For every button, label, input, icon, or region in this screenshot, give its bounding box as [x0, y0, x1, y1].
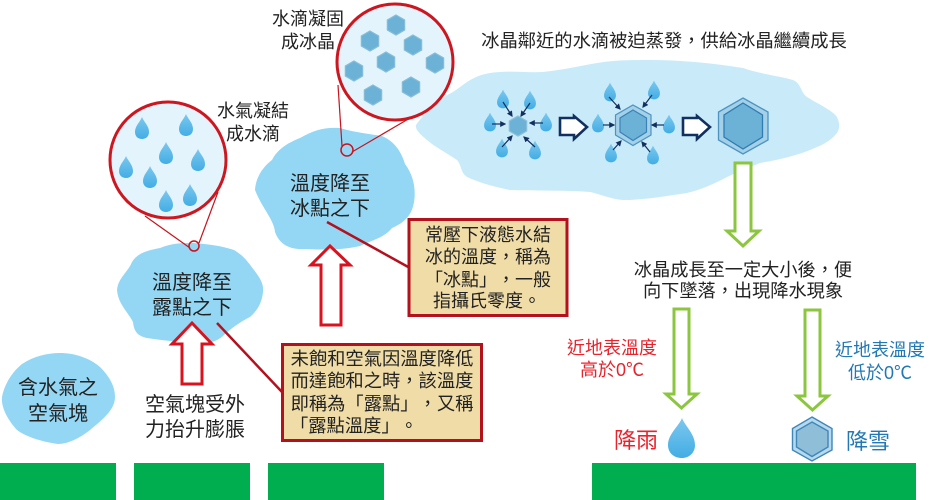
icon: snow crystal	[792, 417, 832, 461]
callout: dew point definition: 而達飽和之時，該溫度	[291, 370, 473, 391]
label: air mass lifted: 力抬升膨脹	[145, 418, 245, 441]
label: crystal growth heading: 冰晶鄰近的水滴被迫蒸發，供給冰晶繼續成長	[481, 30, 847, 51]
label: surface below freezing: 近地表溫度	[835, 340, 925, 360]
label: vapor condenses into droplets: 水氣凝結	[217, 101, 289, 121]
label: air mass: 空氣塊	[28, 402, 88, 425]
label: droplets freeze into crystals: 成冰晶	[281, 32, 335, 52]
label: droplets freeze into crystals: 水滴凝固	[272, 9, 344, 29]
label: surface below freezing: 低於0℃	[848, 363, 912, 383]
red arrow: air mass rises	[172, 323, 212, 384]
ground: left segment 2	[134, 463, 250, 500]
callout leader: freezing point	[327, 222, 410, 268]
callout: dew point definition: 「露點溫度」。	[290, 415, 418, 436]
label: crystal falls as precipitation: 冰晶成長至一定大小後，便	[634, 260, 852, 280]
arrow: growth step 1	[560, 116, 587, 139]
callout: dew point definition: 即稱為「露點」，又稱	[291, 393, 473, 414]
callout leader: dew point	[217, 323, 282, 392]
label: snow: 降雪	[846, 429, 890, 454]
icon: rain drop	[668, 418, 695, 458]
icon: large crystal	[718, 98, 768, 154]
cloud: air mass with moisture	[2, 353, 115, 444]
ground: left segment 1	[0, 463, 116, 500]
callout: freezing point definition: 指攝氏零度。	[433, 291, 541, 311]
label: air mass lifted: 空氣塊受外	[145, 393, 245, 416]
label: air mass: 含水氣之	[18, 376, 98, 399]
callout: dew point definition	[282, 344, 482, 440]
green arrow: toward snow	[797, 310, 828, 410]
label: below dew point: 露點之下	[152, 296, 232, 319]
label: below dew point: 溫度降至	[152, 271, 232, 294]
label: vapor condenses into droplets: 成水滴	[226, 124, 280, 144]
label: below freezing point: 溫度降至	[290, 172, 370, 195]
label: crystal falls as precipitation: 向下墜落，出現降水現象	[643, 281, 843, 301]
callout: dew point definition: 未飽和空氣因溫度降低	[291, 348, 473, 369]
cloud: below dew point	[117, 243, 263, 344]
label: surface above freezing: 高於0℃	[580, 360, 644, 380]
callout: freezing point definition: 常壓下液態水結	[425, 225, 551, 245]
label: rain: 降雨	[614, 428, 658, 453]
red arrow: cooling continues	[311, 246, 350, 325]
green arrow: crystal falls	[727, 163, 759, 246]
cloud: below freezing point	[255, 128, 415, 250]
icon group: small crystal with droplets	[484, 90, 552, 159]
callout: freezing point definition: 冰的溫度，稱為	[425, 247, 551, 267]
arrow: growth step 2	[683, 116, 710, 139]
callout: freezing point definition	[409, 220, 567, 316]
label: surface above freezing: 近地表溫度	[567, 338, 657, 358]
ground: left segment 3	[268, 463, 384, 500]
label: below freezing point: 冰點之下	[290, 197, 370, 220]
magnifier: ice crystals	[337, 4, 453, 156]
green arrow: toward rain	[666, 309, 697, 408]
big cloud: ice crystal growth	[416, 60, 839, 200]
callout: freezing point definition: 「冰點」，一般	[425, 270, 551, 290]
magnifier: water droplets	[110, 102, 226, 251]
ground: right segment	[592, 463, 916, 500]
icon group: medium crystal with droplets	[592, 81, 675, 164]
